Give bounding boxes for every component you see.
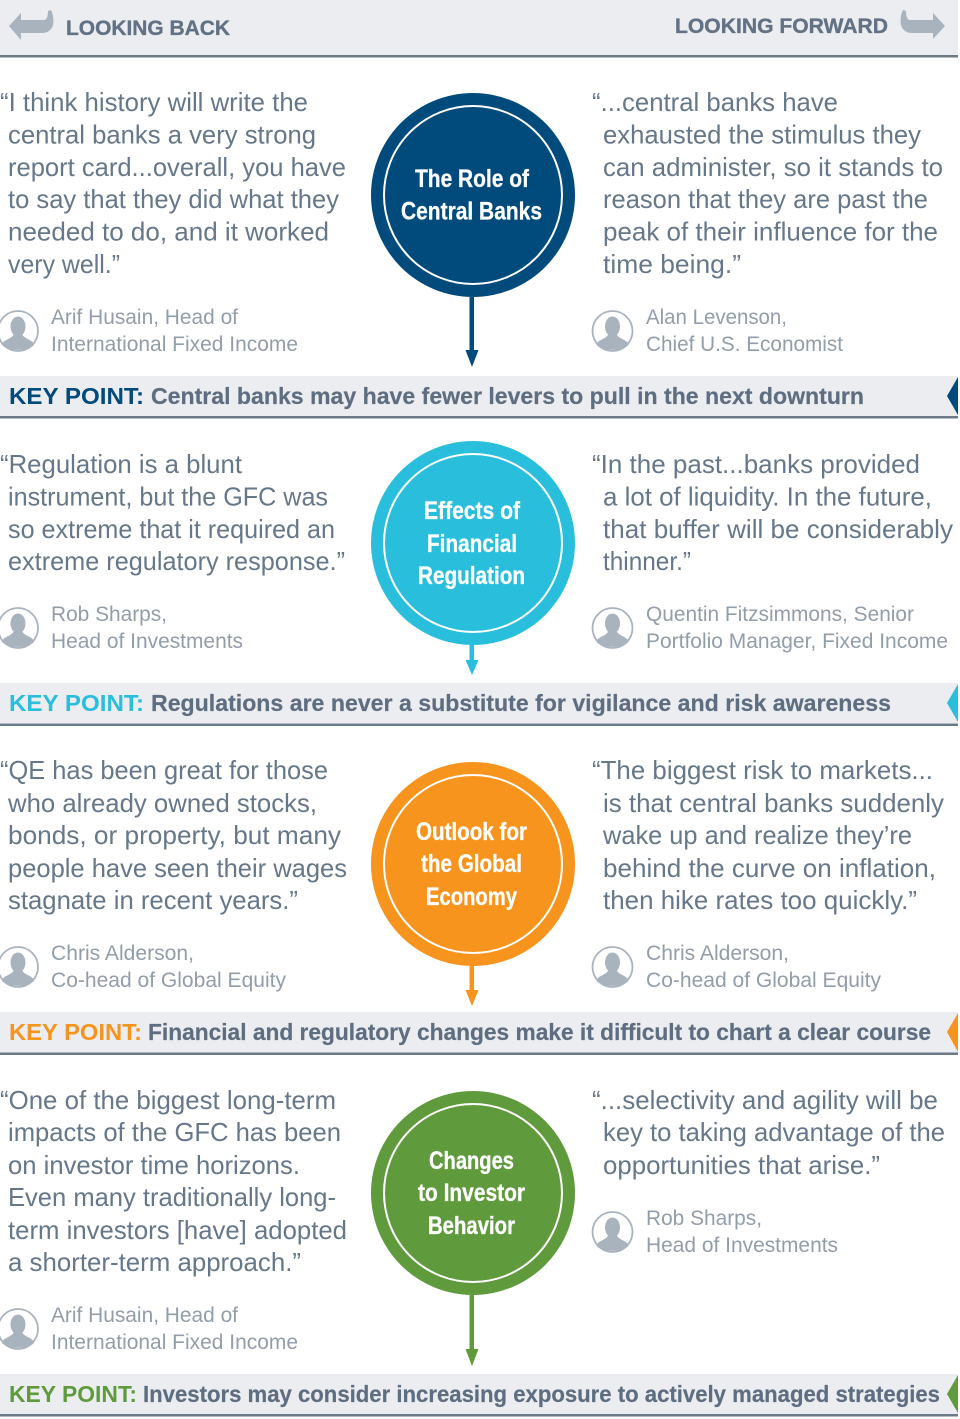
attribution: Arif Husain [0, 1303, 298, 1354]
quote: looking forward, central banks: peak of their influence for the [603, 216, 938, 246]
key point: investor behavior: Investors may consider increasing exposure to actively managed strategies [143, 1381, 940, 1407]
header band [0, 0, 958, 58]
attribution: Quentin Fitzsimmons [592, 602, 948, 653]
attribution: Rob Sharps: Rob Sharps, [646, 1206, 762, 1230]
quote: looking forward, economy: “The biggest risk to markets... [592, 755, 933, 785]
quote: looking back, economy: stagnate in recent years.” [8, 885, 298, 915]
quote: looking back, investor behavior: on investor time horizons. [8, 1150, 300, 1180]
heading: looking forward: LOOKING FORWARD [675, 14, 888, 38]
quote: looking forward, central banks: exhausted the stimulus they [603, 120, 921, 150]
key point: central banks: KEY POINT: [9, 383, 144, 409]
quote: looking forward, investor behavior: key to taking advantage of the [603, 1117, 945, 1147]
quote: looking back, investor behavior: Even many traditionally long- [8, 1182, 336, 1212]
attribution: Chris Alderson [592, 941, 881, 992]
badge: effects of financial regulation: Regulation [418, 562, 525, 590]
badge: outlook for the global economy: Economy [426, 883, 517, 911]
attribution: Rob Sharps: Rob Sharps, [51, 602, 167, 626]
arrow: down to key point [466, 297, 478, 367]
panel: the role of central banks [0, 87, 958, 418]
quote: looking back, investor behavior: “One of the biggest long-term [0, 1085, 336, 1115]
attribution: Chris Alderson [0, 941, 286, 992]
icon: looking back arrow [9, 10, 53, 40]
quote: looking back, regulation: instrument, but the GFC was [8, 482, 328, 512]
quote: looking back, central banks: report card...overall, you have [8, 152, 346, 182]
quote: looking back, investor behavior: impacts of the GFC has been [8, 1117, 341, 1147]
quote: looking forward, regulation: thinner.” [603, 546, 691, 576]
badge: outlook for the global economy: Outlook for [416, 818, 527, 846]
attribution: Chris Alderson: Co-head of Global Equity [646, 968, 881, 992]
attribution: Quentin Fitzsimmons: Quentin Fitzsimmons, Senior [646, 602, 914, 626]
quote: looking back, regulation: extreme regulatory response.” [8, 546, 345, 576]
key point: investor behavior [0, 1374, 958, 1416]
badge: outlook for the global economy [371, 762, 575, 966]
quote: looking back, investor behavior: a shorter-term approach.” [8, 1247, 301, 1277]
quote: looking forward, regulation: “In the past...banks provided [592, 449, 920, 479]
panel: effects of financial regulation [0, 441, 958, 726]
attribution: Chris Alderson: Chris Alderson, [646, 941, 789, 965]
quote: looking back, central banks: “I think history will write the [0, 87, 308, 117]
attribution: Rob Sharps: Head of Investments [646, 1233, 838, 1257]
key point: economy [0, 1012, 958, 1055]
quote: looking back, economy: “QE has been great for those [0, 755, 328, 785]
quote: looking forward, economy [592, 755, 944, 915]
badge: the role of central banks [371, 93, 575, 297]
arrow: down to key point [466, 645, 478, 675]
quote: looking forward, regulation: that buffer will be considerably [603, 514, 953, 544]
quote: looking forward, investor behavior: “...selectivity and agility will be [592, 1085, 938, 1115]
quote: looking forward, central banks: “...central banks have [592, 87, 838, 117]
heading: looking back: LOOKING BACK [66, 16, 230, 40]
quote: looking back, central banks: central banks a very strong [8, 120, 316, 150]
attribution: Rob Sharps [592, 1206, 838, 1257]
quote: looking back, regulation [0, 449, 345, 576]
attribution: Alan Levenson [592, 305, 843, 356]
quote: looking back, investor behavior [0, 1085, 347, 1277]
badge: changes to investor behavior [371, 1091, 575, 1295]
attribution: Arif Husain: International Fixed Income [51, 1330, 298, 1354]
attribution: Arif Husain: Arif Husain, Head of [51, 1303, 238, 1327]
quote: looking back, investor behavior: term investors [have] adopted [8, 1215, 347, 1245]
attribution: Chris Alderson: Chris Alderson, [51, 941, 194, 965]
quote: looking back, economy: who already owned stocks, [7, 788, 317, 818]
badge: changes to investor behavior: Changes [429, 1147, 514, 1175]
badge: effects of financial regulation: Effects of [424, 497, 521, 525]
badge: effects of financial regulation: Financial [427, 530, 517, 558]
icon: looking forward arrow [901, 10, 945, 39]
key point: economy: KEY POINT: [9, 1019, 142, 1045]
key point: investor behavior: KEY POINT: [9, 1381, 137, 1407]
badge: changes to investor behavior: to Investor [418, 1179, 525, 1207]
quote: looking forward, economy: behind the curve on inflation, [603, 853, 936, 883]
quote: looking back, regulation: so extreme that it required an [8, 514, 335, 544]
quote: looking forward, economy: then hike rates too quickly.” [603, 885, 917, 915]
quote: looking back, central banks: to say that they did what they [8, 184, 339, 214]
attribution: Quentin Fitzsimmons: Portfolio Manager, Fixed Income [646, 629, 948, 653]
quote: looking forward, investor behavior [592, 1085, 945, 1180]
quote: looking back, regulation: “Regulation is a blunt [0, 449, 243, 479]
attribution: Alan Levenson: Alan Levenson, [646, 305, 787, 329]
key point: regulation [0, 683, 958, 726]
quote: looking back, economy: bonds, or property, but many [8, 820, 341, 850]
badge: effects of financial regulation [371, 441, 575, 645]
quote: looking forward, central banks: can administer, so it stands to [603, 152, 943, 182]
badge: outlook for the global economy: the Global [421, 850, 522, 878]
attribution: Rob Sharps: Head of Investments [51, 629, 243, 653]
quote: looking forward, economy: wake up and realize they’re [602, 820, 912, 850]
quote: looking back, central banks [0, 87, 346, 279]
quote: looking back, central banks: very well.” [8, 249, 120, 279]
arrow: down to key point [466, 966, 478, 1006]
attribution: Arif Husain: Arif Husain, Head of [51, 305, 238, 329]
attribution: Chris Alderson: Co-head of Global Equity [51, 968, 286, 992]
quote: looking forward, investor behavior: opportunities that arise.” [603, 1150, 880, 1180]
badge: changes to investor behavior: Behavior [428, 1212, 515, 1240]
attribution: Arif Husain: International Fixed Income [51, 332, 298, 356]
key point: regulation: KEY POINT: [9, 690, 144, 716]
panel: changes to investor behavior [0, 1085, 958, 1416]
attribution: Alan Levenson: Chief U.S. Economist [646, 332, 843, 356]
panel: outlook for the global economy [0, 755, 958, 1055]
quote: looking back, central banks: needed to do, and it worked [8, 216, 329, 246]
key point: regulation: Regulations are never a substitute for vigilance and risk awareness [151, 690, 891, 716]
arrow: down to key point [466, 1295, 478, 1366]
key point: central banks: Central banks may have fewer levers to pull in the next downturn [151, 383, 864, 409]
key point: economy: Financial and regulatory changes make it difficult to chart a clear course [148, 1019, 931, 1045]
key point: central banks [0, 376, 958, 418]
quote: looking forward, regulation: a lot of liquidity. In the future, [603, 482, 932, 512]
badge: the role of central banks: Central Banks [401, 198, 542, 226]
attribution: Rob Sharps [0, 602, 243, 653]
quote: looking forward, regulation [592, 449, 953, 576]
quote: looking forward, central banks: time being.” [603, 249, 741, 279]
quote: looking forward, central banks: reason that they are past the [603, 184, 928, 214]
attribution: Arif Husain [0, 305, 298, 356]
quote: looking back, economy: people have seen their wages [8, 853, 347, 883]
quote: looking back, economy [0, 755, 347, 915]
quote: looking forward, economy: is that central banks suddenly [603, 788, 944, 818]
quote: looking forward, central banks [592, 87, 943, 279]
badge: the role of central banks: The Role of [415, 165, 530, 193]
